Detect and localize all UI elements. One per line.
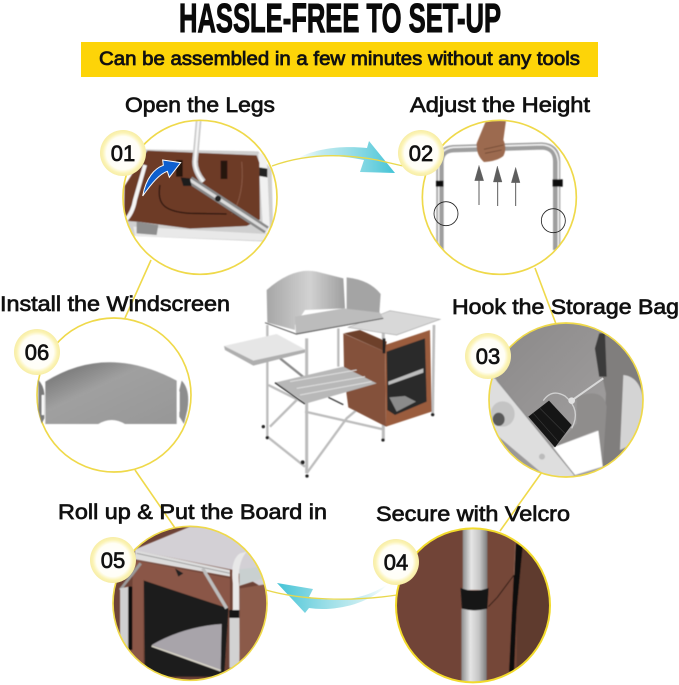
legs and frame bbox=[267, 325, 434, 473]
badge 02: 02 bbox=[409, 141, 433, 166]
photo: table top with mesh cabinet bbox=[120, 527, 270, 680]
connector line: 06 to 05 bbox=[135, 470, 175, 528]
connector line: 03 to 04 bbox=[500, 472, 542, 531]
arrow: step 01 to 02 bbox=[272, 141, 403, 173]
panel: step 03 hook the storage bag bbox=[487, 323, 650, 480]
badge 06 bbox=[14, 329, 60, 375]
panel: step 06 install the windscreen bbox=[37, 318, 191, 472]
label: hook the storage bag: Hook the Storage Bag bbox=[452, 296, 679, 319]
middle slatted shelf bbox=[275, 367, 377, 403]
feet bbox=[262, 413, 434, 478]
icon: up arrows bbox=[475, 165, 520, 206]
strap bbox=[528, 401, 572, 447]
panel: step 05 roll up and put the board in bbox=[113, 526, 270, 680]
label: install the windscreen: Install the Windscreen bbox=[0, 293, 230, 316]
label: roll up and put the board in: Roll up & Put the Board in bbox=[58, 501, 327, 524]
photo: hook and strap detail bbox=[490, 332, 642, 476]
label: secure with velcro: Secure with Velcro bbox=[376, 503, 570, 526]
label: open the legs: Open the Legs bbox=[125, 94, 275, 117]
label: adjust the height: Adjust the Height bbox=[410, 94, 590, 117]
photo: pole with velcro strap on brown fabric bbox=[461, 527, 553, 685]
icon: blue curved arrow bbox=[143, 160, 181, 196]
arrow: step 04 to 05 bbox=[266, 583, 397, 613]
windscreen bbox=[267, 271, 345, 330]
panel: step 04 secure with velcro bbox=[396, 527, 553, 685]
badge 01: 01 bbox=[111, 141, 135, 166]
subtitle banner bbox=[81, 42, 598, 77]
connector line: 01 to 06 bbox=[125, 260, 151, 318]
panel: step 02 adjust the height bbox=[422, 120, 576, 274]
top shelf edge bbox=[265, 318, 383, 334]
right table top bbox=[348, 311, 440, 335]
badge 03: 03 bbox=[476, 344, 500, 369]
central product photo: camp kitchen table bbox=[224, 271, 440, 478]
connector line: 02 to 03 bbox=[535, 268, 556, 324]
mesh door bbox=[387, 338, 427, 415]
badge 02 bbox=[398, 130, 444, 176]
subtitle banner: Can be assembled in a few minutes without any tools bbox=[99, 48, 580, 70]
photo: folded frame with brown bag bbox=[124, 120, 273, 242]
panel: step 01 open the legs bbox=[123, 120, 277, 274]
badge 01 bbox=[100, 130, 146, 176]
badge 05: 05 bbox=[101, 548, 125, 573]
badge 06: 06 bbox=[25, 340, 49, 365]
photo: grey windscreen bbox=[38, 362, 188, 424]
badge 04: 04 bbox=[384, 550, 408, 575]
brown storage bag bbox=[343, 333, 386, 427]
badge 05 bbox=[90, 537, 136, 583]
photo: raised frame with hand and arrows bbox=[434, 121, 565, 250]
badge 03 bbox=[465, 333, 511, 379]
badge 04 bbox=[373, 539, 419, 585]
left side table bbox=[224, 334, 305, 365]
